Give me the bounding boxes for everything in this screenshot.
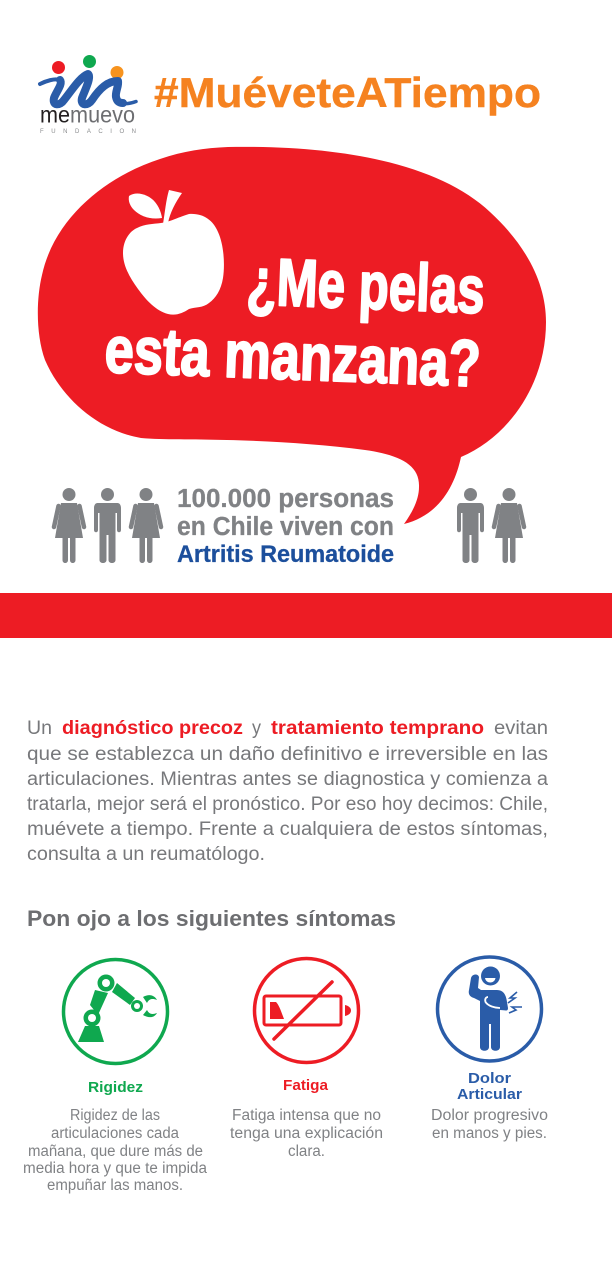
Dolor Articular title: Articular [457,1086,522,1103]
Dolor Articular title: Dolor [468,1070,511,1087]
paragraph line 1: Un [27,718,52,739]
logo wordmark: memuevo [40,102,135,128]
Rigidez description: empuñar las manos. [47,1177,183,1194]
Rigidez description: Rigidez de las [70,1107,160,1124]
Fatiga description: Fatiga intensa que no [232,1107,381,1124]
icon: robot arm [64,960,168,1064]
logo subtitle: FUNDACION [40,129,136,135]
statistic line 3: Artritis Reumatoide [177,541,394,568]
bubble headline [103,244,486,400]
Rigidez description: media hora y que te impida [23,1160,207,1177]
statistic line 2: en Chile viven con [177,513,394,541]
icon: man [457,488,484,563]
paragraph line 1: evitan [494,718,548,739]
paragraph line 1 [27,718,548,739]
Dolor Articular description [431,1107,548,1142]
paragraph line 1: tratamiento temprano [271,718,484,739]
red band [0,593,612,638]
paragraph line 4: tratarla, mejor será el pronóstico. Por eso hoy decimos: Chile, [27,794,548,815]
headline line 1: ¿Me pelas [245,244,486,328]
Fatiga description [230,1107,383,1160]
headline line 2: esta manzana? [103,312,482,400]
logo dots [52,55,124,79]
logo waves [40,74,136,104]
icon: woman [494,488,524,563]
paragraph line 1: y [252,718,261,739]
statistic line 1: 100.000 personas [177,485,394,513]
paragraph line 3: articulaciones. Mientras antes se diagnostica y comienza a [27,769,548,790]
Fatiga description: tenga una explicación [230,1125,383,1142]
apple body [123,214,224,315]
hashtag title: #MuéveteATiempo [154,69,541,116]
speech bubble [38,147,546,524]
icon: empty battery crossed out [254,958,358,1062]
Rigidez description: mañana, que dure más de [28,1143,203,1160]
apple leaf [129,194,162,219]
Fatiga description: clara. [288,1143,325,1160]
paragraph line 1: diagnóstico precoz [62,718,243,739]
icon: woman [54,488,84,563]
symptoms heading: Pon ojo a los siguientes síntomas [27,906,396,931]
icon: woman [131,488,161,563]
paragraph line 6: consulta a un reumatólogo. [27,844,265,865]
Dolor Articular description: en manos y pies. [432,1125,547,1142]
people icons left [54,488,161,563]
icon: man [94,488,121,563]
Rigidez description [23,1107,207,1194]
intro paragraph [27,718,548,865]
paragraph line 2: que se establezca un daño definitivo e irreversible en las [27,744,548,765]
symptom: Fatiga [230,958,383,1160]
Dolor Articular title [457,1070,522,1103]
symptom: Rigidez [23,960,207,1194]
Dolor Articular description: Dolor progresivo [431,1107,548,1124]
people icons right [457,488,524,563]
apple stem [163,190,182,224]
paragraph line 5: muévete a tiempo. Frente a cualquiera de estos síntomas, [27,819,548,840]
symptom: Dolor Articular [431,957,548,1142]
icon: person with joint pain [438,957,542,1061]
icon: apple [123,190,224,315]
Fatiga title: Fatiga [283,1077,329,1094]
Rigidez title: Rigidez [88,1079,143,1096]
logo: memuevo fundación [40,55,136,135]
statistic text [177,485,394,568]
Rigidez description: articulaciones cada [51,1125,179,1142]
